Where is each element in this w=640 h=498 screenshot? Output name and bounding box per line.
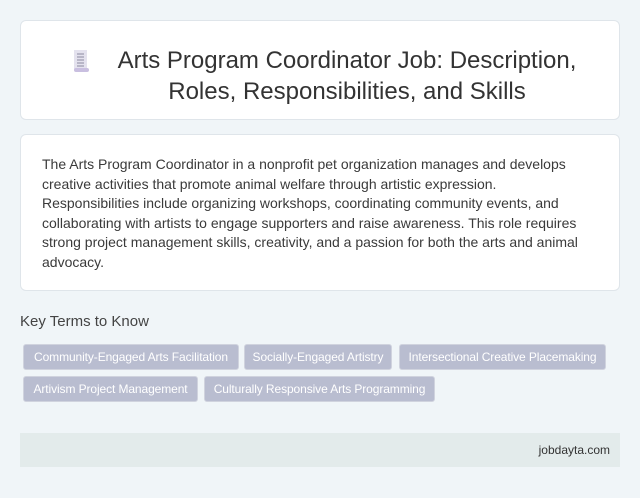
tag [399,344,606,370]
title: Arts Program Coordinator Job: Description, Roles, Responsibilities, and Skills [118,47,576,105]
title card [20,20,620,120]
description text: The Arts Program Coordinator in a nonprofit pet organization manages and develops creative activities that promote animal welfare through artistic expression. Responsibilities include organizing workshops, coordinating community events, and collaborating with artists to engage supporters and raise awareness. This role requires strong project management skills, creativity, and a passion for both the arts and animal advocacy. [42,156,578,270]
tag: Culturally Responsive Arts Programming [214,382,425,396]
tag: Community-Engaged Arts Facilitation [34,350,228,364]
tag: Intersectional Creative Placemaking [409,350,596,364]
tag [23,376,198,402]
tag: Artivism Project Management [33,382,188,396]
tag: Socially-Engaged Artistry [253,350,383,364]
tag [244,344,392,370]
icon: document [74,50,89,72]
footer [20,433,620,467]
tag [204,376,435,402]
tag [23,344,239,370]
description card [20,134,620,291]
footer text: jobdayta.com [539,443,610,457]
heading: key terms: Key Terms to Know [20,313,149,330]
